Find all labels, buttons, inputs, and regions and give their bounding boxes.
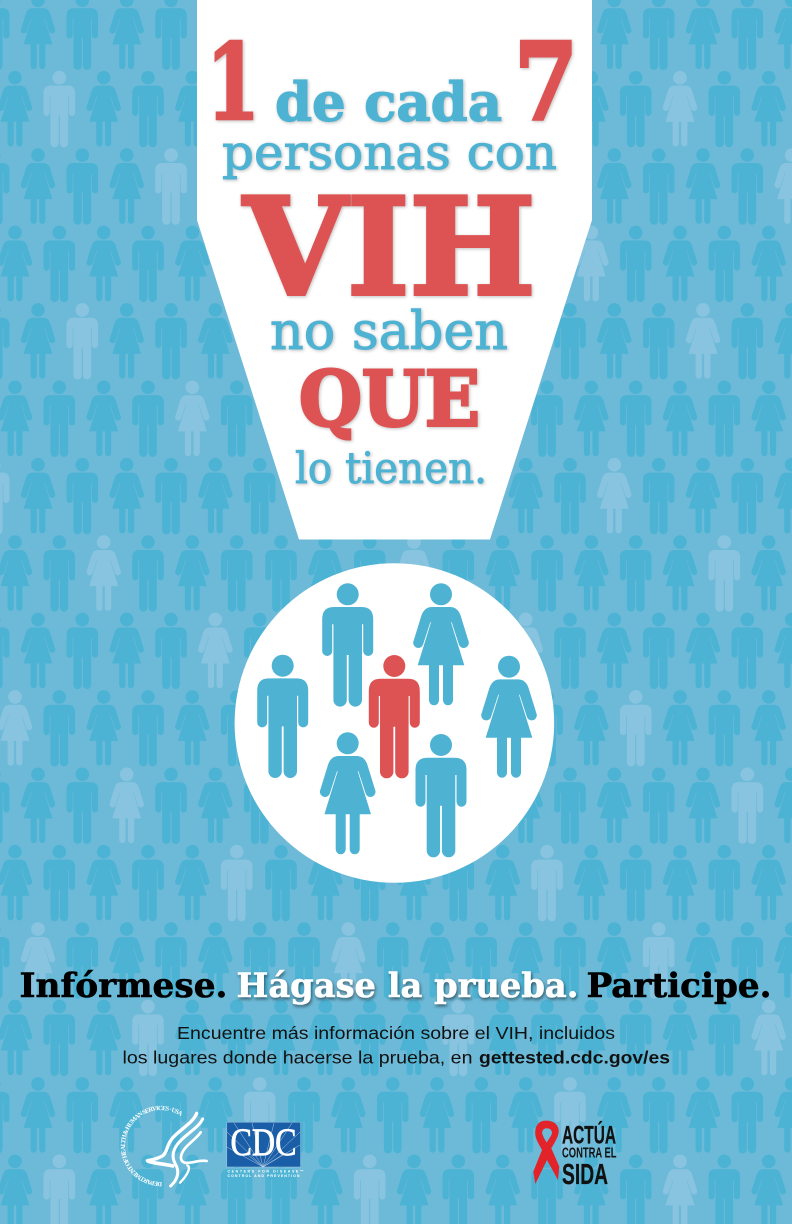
icon: man left	[257, 655, 308, 778]
logo: HHS seal	[120, 1106, 208, 1188]
personas con: personas con	[222, 125, 557, 181]
lo tienen.: lo tienen.	[295, 444, 487, 494]
seal ring text: DEPARTMENT OF HEALTH & HUMAN SERVICES · USA	[120, 1106, 182, 1186]
icon: eagle	[147, 1113, 207, 1186]
QUE: QUE	[299, 354, 480, 444]
website: gettested.cdc.gov/es	[479, 1047, 670, 1067]
logo rays	[227, 1123, 300, 1167]
Hágase la prueba: Hágase la prueba.	[236, 966, 578, 1005]
VIH: VIH	[243, 168, 535, 326]
SIDA: SIDA	[562, 1159, 608, 1191]
headline	[206, 20, 578, 494]
CDC name: CENTERS FOR DISEASE™	[228, 1169, 304, 1173]
line 2: los lugares donde hacerse la prueba, en	[122, 1047, 472, 1067]
icon: woman bottom	[320, 732, 376, 854]
number 1: 1	[206, 20, 260, 144]
no saben: no saben	[270, 302, 508, 362]
CDC letters: CDC	[230, 1121, 296, 1164]
icon: red ribbon	[533, 1121, 559, 1184]
panel: white circle with seven people	[235, 563, 554, 883]
icon: red man, the one in seven	[369, 655, 420, 778]
Infórmese: Infórmese.	[20, 966, 228, 1005]
CONTRA EL: CONTRA EL	[562, 1146, 617, 1162]
icon: man bottom	[416, 734, 466, 857]
CDC name line 2: CONTROL AND PREVENTION	[228, 1174, 300, 1178]
panel: white headline banner	[197, 0, 592, 540]
line 1: Encuentre más información sobre el VIH, incluidos	[177, 1023, 615, 1043]
de cada: de cada	[275, 72, 502, 134]
icon: man top left	[322, 583, 373, 707]
Participe: Participe.	[586, 966, 772, 1005]
number 7: 7	[514, 20, 578, 145]
icon: woman right	[481, 656, 537, 778]
icon: woman top	[413, 583, 469, 705]
logo: Actúa contra el SIDA	[533, 1119, 617, 1191]
call to action tagline	[20, 966, 772, 1005]
ACTÚA: ACTÚA	[562, 1119, 616, 1149]
information text	[122, 1023, 670, 1067]
logo: CDC	[227, 1121, 304, 1178]
